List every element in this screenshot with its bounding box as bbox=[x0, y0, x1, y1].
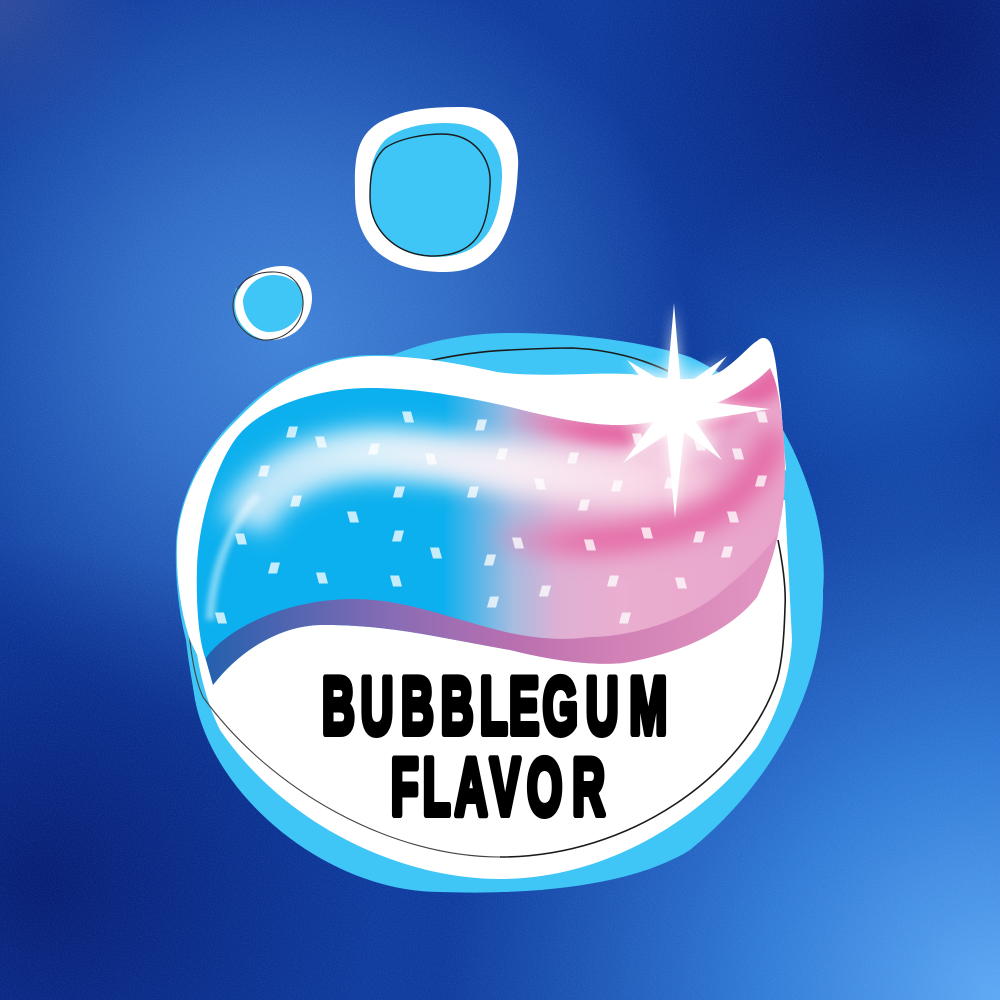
pink upper band bbox=[500, 372, 785, 435]
underside rim bbox=[206, 534, 778, 685]
large bubble bbox=[355, 107, 518, 272]
badge: white disc bbox=[195, 500, 792, 879]
toothpaste ribbon bbox=[196, 368, 785, 685]
white highlight band bbox=[245, 453, 705, 526]
label: flavor name: BUBBLEGUM bbox=[322, 661, 667, 751]
left specular bbox=[210, 495, 258, 620]
sparkle star bbox=[600, 303, 770, 518]
small bubble bbox=[233, 266, 312, 340]
badge: outer blue blob bbox=[176, 333, 824, 893]
label: flavor name: FLAVOR bbox=[391, 742, 605, 832]
pink middle band bbox=[490, 433, 775, 541]
badge: thin outline top bbox=[428, 348, 670, 372]
badge: thin outline bottom bbox=[188, 540, 785, 857]
label: flavor name bbox=[322, 661, 667, 832]
toothpaste white border bbox=[177, 338, 786, 688]
sparkles on paste bbox=[215, 412, 768, 624]
